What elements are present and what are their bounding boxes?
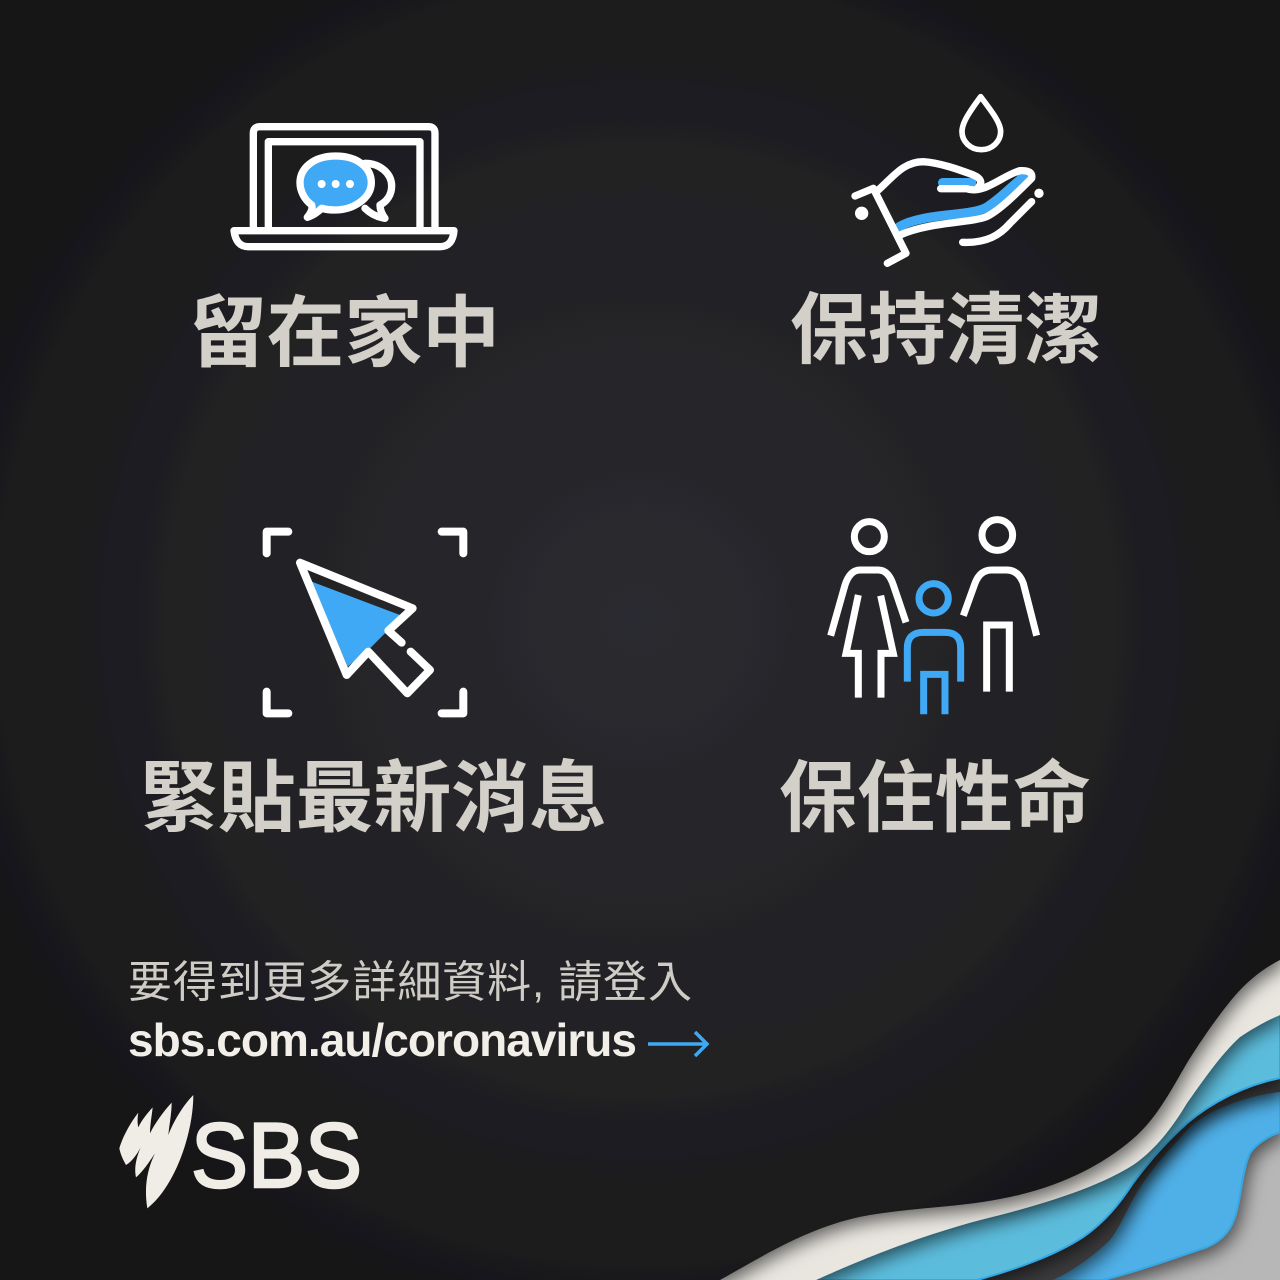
icon: hand with water drop (855, 97, 1044, 263)
text: website url: sbs.com.au/coronavirus (128, 1014, 637, 1066)
icon: cursor arrow with corner brackets (267, 532, 463, 713)
icon: laptop with chat bubbles (234, 127, 454, 247)
icon: family of three (831, 520, 1037, 714)
heading: save lives: 保住性命 (779, 754, 1091, 842)
text: more information prompt: 要得到更多詳細資料, 請登入 (128, 958, 692, 1007)
heading: stay updated: 緊貼最新消息 (140, 754, 607, 842)
icon: blue arrow (648, 1032, 707, 1056)
heading: stay home: 留在家中 (189, 289, 500, 377)
heading: stay clean: 保持清潔 (790, 286, 1102, 374)
logo wordmark: SBS (191, 1105, 362, 1207)
logo mercury mark (119, 1095, 193, 1208)
SBS logo (119, 1095, 362, 1208)
